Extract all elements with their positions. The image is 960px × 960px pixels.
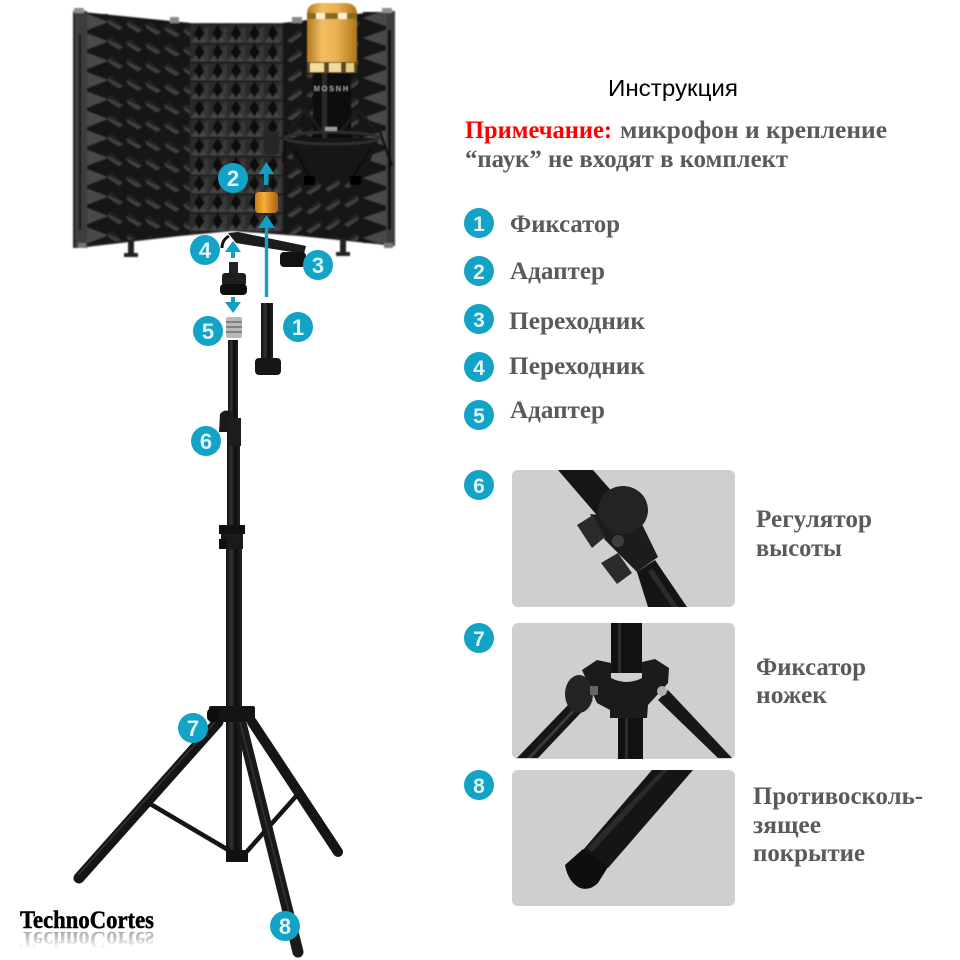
panel 8: anti-slip tip: 8 [473, 775, 485, 798]
arrows [225, 162, 275, 313]
parts list: 4 [473, 357, 485, 380]
parts list: 1 [473, 213, 485, 236]
text: height regulator: высоты [756, 535, 842, 562]
mount arm [222, 232, 306, 267]
badges on the stand photo: 5 [202, 319, 214, 344]
parts list [464, 208, 646, 430]
text: height regulator: Регулятор [756, 506, 872, 533]
panel 6: height regulator [464, 470, 872, 607]
badges on the stand photo: 7 [187, 716, 199, 741]
text: anti-slip coating: Противосколь- [753, 783, 923, 810]
note: микрофон и крепление [620, 117, 887, 144]
parts list: Адаптер [510, 258, 605, 285]
text: leg lock [756, 654, 866, 709]
parts list: Фиксатор [510, 211, 620, 238]
badges on the stand photo: 1 [292, 315, 304, 340]
tripod stand [78, 340, 338, 952]
text: leg lock: Фиксатор [756, 654, 866, 681]
parts list: Переходник [509, 308, 646, 335]
title: Инструкция [608, 75, 738, 101]
badges on the stand photo: 6 [200, 429, 212, 454]
watermark: TechnoCortes [20, 926, 154, 953]
text: anti-slip coating: покрытие [753, 840, 865, 867]
badges on the stand photo: 2 [227, 166, 239, 191]
text: anti-slip coating [753, 783, 923, 867]
badges on the stand photo [178, 163, 333, 941]
text: anti-slip coating: зящее [753, 812, 821, 839]
parts list: Адаптер [510, 397, 605, 424]
microphone with shock mount: MOSNH [314, 86, 350, 93]
text: leg lock: ножек [756, 682, 828, 709]
badges on the stand photo: 4 [199, 238, 212, 263]
parts list: 2 [473, 261, 485, 284]
microphone with shock mount [264, 3, 392, 185]
acoustic foam shield [73, 8, 395, 257]
panel 7: leg lock: 7 [473, 628, 485, 651]
adapter ring [255, 192, 278, 213]
badges on the stand photo: 3 [312, 253, 324, 278]
note [465, 117, 887, 173]
panel 7: leg lock [464, 623, 866, 759]
part: screw adapter [220, 262, 247, 295]
note: Примечание: [465, 117, 612, 144]
watermark [15, 907, 160, 954]
note: “паук” не входят в комплект [465, 146, 788, 173]
parts list: 5 [473, 405, 485, 428]
badges on the stand photo: 8 [279, 914, 291, 939]
panel 8: anti-slip tip [464, 770, 923, 906]
part: silver adapter [226, 317, 242, 338]
panel 6: height regulator: 6 [473, 475, 485, 498]
text: height regulator [756, 506, 872, 562]
part: long fixing screw [255, 303, 281, 375]
parts list: 3 [473, 309, 485, 332]
watermark: TechnoCortes [20, 907, 154, 934]
parts list: Переходник [509, 353, 646, 380]
